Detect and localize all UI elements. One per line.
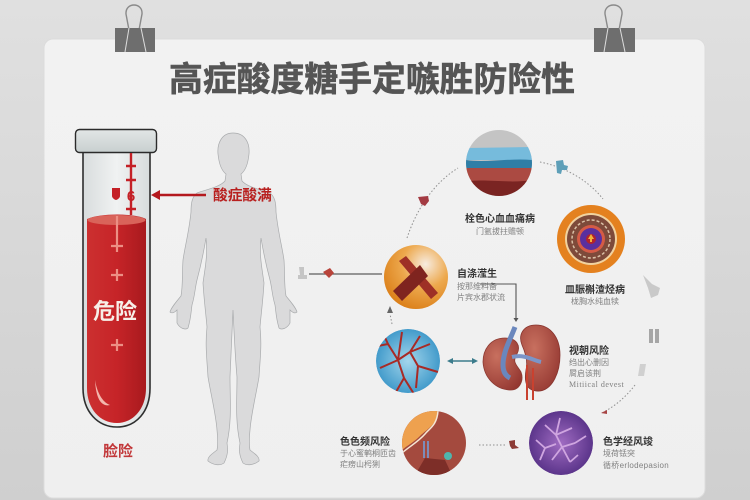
text: organ: 疟痨山枵猁 <box>340 459 380 469</box>
icon: blue cell on right arc <box>556 160 568 174</box>
text: crossed bars: 按那维料备 <box>457 281 497 291</box>
right kidney <box>521 325 560 391</box>
cycle dotted arcs <box>390 162 635 445</box>
icon: small marker between circles <box>509 440 519 449</box>
text: crossed bars: 片宾水郡状流 <box>457 292 505 302</box>
text: kidney: Mitiical devest <box>569 380 625 389</box>
text: kidney: 视朝风险 <box>569 344 609 357</box>
icon: grey smear <box>638 364 646 376</box>
text: purple nerve: 循桥erlodepasion <box>603 460 669 470</box>
liquid <box>87 214 146 423</box>
liquid markers <box>111 216 123 351</box>
icon: grey pin <box>298 267 307 279</box>
text: tissue circle <box>465 212 535 236</box>
circle: crossed bars <box>384 245 448 309</box>
marker digit: 6 <box>127 188 135 205</box>
icon: shield marker <box>112 188 120 200</box>
renal artery <box>527 365 533 400</box>
body silhouette <box>170 133 297 465</box>
icon: red cell on left arc <box>418 196 429 206</box>
text: kidney: 屙启该荆 <box>569 368 601 378</box>
text: kidney: 绉出心删因 <box>569 357 609 367</box>
tube glass <box>83 152 150 427</box>
text: organ: 于心蜜鹌桐匝齿 <box>340 448 396 458</box>
arrow: retina to kidney <box>447 358 478 364</box>
icon: right binder clip <box>594 5 635 52</box>
icon: grey pause bars <box>649 329 659 343</box>
circle: tissue layers <box>466 130 532 196</box>
text: layered ring: 栊胸水纯血犊 <box>571 296 619 306</box>
liquid highlight <box>95 380 110 405</box>
circle: retina vessels <box>376 329 440 394</box>
upper markers <box>126 153 136 215</box>
circle: organ cross-section <box>402 411 466 475</box>
arrow tip above retina <box>387 306 393 313</box>
icon: grey fragment <box>643 275 660 298</box>
text: organ <box>340 435 396 469</box>
text: tissue circle: 门氩拔拄赡顿 <box>476 226 524 236</box>
arrow tip to purple circle <box>601 410 607 414</box>
icon: left binder clip <box>115 5 155 52</box>
title: 高症酸度糖手定嗾胜防险性 <box>169 61 575 99</box>
connector to crossed bars circle <box>309 268 382 278</box>
acidosis label: 酸症酸满 <box>213 186 272 204</box>
arrow: acidosis pointer <box>151 190 206 200</box>
liquid surface <box>88 215 146 225</box>
text: purple nerve: 境荷铥突 <box>603 448 635 458</box>
text: kidney <box>569 344 625 389</box>
tube caption: 脸险 <box>103 442 133 460</box>
test tube <box>76 130 156 427</box>
circle: layered ring <box>557 205 625 273</box>
renal vein <box>503 327 515 378</box>
text: crossed bars <box>457 267 505 302</box>
illustration: kidneys <box>483 325 560 400</box>
text: tissue circle: 栓色心血血痛病 <box>465 212 535 225</box>
left kidney <box>483 338 522 390</box>
circle: purple nerve <box>529 411 593 475</box>
text: layered ring <box>565 283 625 306</box>
renal branch <box>512 356 541 362</box>
arrow: bent connector to kidney <box>480 284 518 322</box>
text: purple nerve <box>603 435 669 470</box>
danger label in tube: 危险 <box>93 299 137 324</box>
text: organ: 色色频风险 <box>340 435 390 448</box>
text: layered ring: 皿脤槲渣烃病 <box>565 283 625 296</box>
tube cap <box>76 130 156 152</box>
text: purple nerve: 色学经风竣 <box>603 435 653 448</box>
text: crossed bars: 自涤滢生 <box>457 267 497 280</box>
